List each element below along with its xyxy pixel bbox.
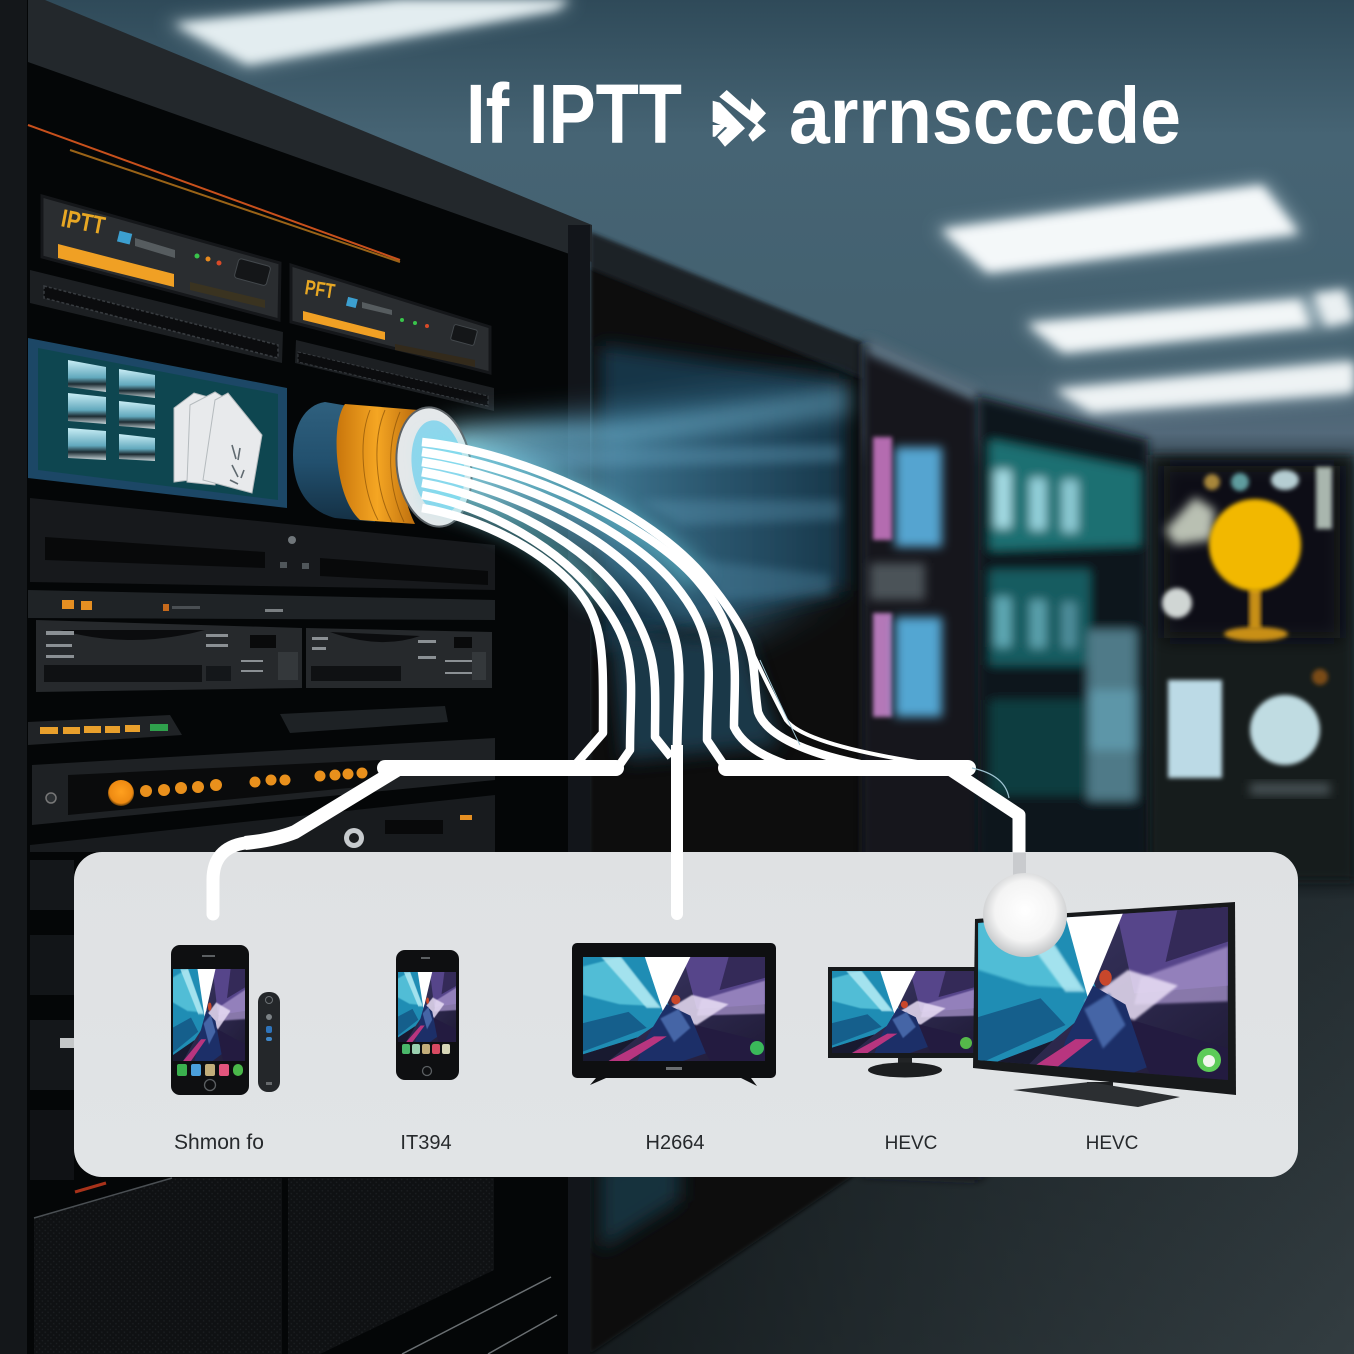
rack top frame xyxy=(28,0,592,262)
orange threaded collar xyxy=(337,404,418,524)
control bar xyxy=(28,590,495,620)
rack three xyxy=(862,338,978,1180)
device: large television xyxy=(973,902,1236,1107)
label 1: Shmon fo xyxy=(174,1131,264,1154)
side latch tray xyxy=(280,706,448,733)
cable to centre device xyxy=(671,848,683,920)
light beam from cable end xyxy=(440,368,850,760)
label 4: HEVC xyxy=(885,1133,937,1154)
device: tablet television xyxy=(572,943,776,1086)
rack two xyxy=(590,232,862,1354)
route to centre device xyxy=(422,472,679,860)
distant server racks xyxy=(590,232,1354,1354)
video thumbnails xyxy=(68,360,155,461)
rack two blurred contents xyxy=(600,345,845,1250)
server strip two xyxy=(295,340,494,411)
server strip one xyxy=(30,270,283,363)
rack five with yellow display xyxy=(1150,455,1354,880)
icon: double chevron xyxy=(713,90,766,147)
foreground server rack xyxy=(0,0,592,1354)
device: phone and remote xyxy=(171,945,280,1095)
connector neck xyxy=(1013,853,1026,883)
server unit IPTT one: IPTT xyxy=(59,204,107,240)
remote control xyxy=(258,992,280,1092)
rack left stubs beside panel xyxy=(30,860,74,1180)
rack left post xyxy=(0,0,27,1354)
ingest dashboard screen xyxy=(28,338,287,508)
ceiling lights xyxy=(165,0,1354,415)
label 2: IT394 xyxy=(400,1132,452,1154)
label 3: H2664 xyxy=(646,1132,704,1154)
lower drive bay unit xyxy=(30,498,495,590)
twin drive modules xyxy=(36,620,492,692)
server unit IPTT two: PFT xyxy=(303,276,337,304)
cable mouth xyxy=(406,417,470,517)
lower amplifier unit xyxy=(30,795,495,852)
white fibre routes xyxy=(245,442,1019,860)
document marks xyxy=(230,445,244,484)
orange indicator tray xyxy=(28,715,182,745)
rack bottom grilles xyxy=(34,1178,557,1354)
cable to phone xyxy=(213,843,245,914)
fibre bundle glow xyxy=(425,450,697,600)
coaxial cable head xyxy=(293,402,479,532)
rack body xyxy=(0,0,590,1354)
panel: target devices xyxy=(74,843,1298,1177)
device: small phone xyxy=(396,950,459,1080)
route to left devices xyxy=(245,495,631,843)
knob panel xyxy=(32,738,495,825)
orange cables xyxy=(28,125,400,262)
server unit IPTT one xyxy=(42,196,280,320)
title right: arrnscccde xyxy=(789,71,1181,160)
label 5: HEVC xyxy=(1086,1133,1138,1154)
document stack icon xyxy=(174,392,262,493)
play badge xyxy=(1197,1048,1221,1072)
blue cable body xyxy=(293,402,375,522)
rack centre post xyxy=(568,225,590,1354)
connector ball xyxy=(983,873,1067,957)
title xyxy=(466,67,1181,161)
route to right devices xyxy=(422,442,1019,860)
device: desktop monitor xyxy=(828,967,976,1078)
device labels xyxy=(174,1131,1138,1154)
server unit IPTT two xyxy=(291,265,490,373)
rack four xyxy=(978,396,1148,1180)
metal collar ring xyxy=(389,402,479,532)
title left: If IPTT xyxy=(466,67,682,161)
